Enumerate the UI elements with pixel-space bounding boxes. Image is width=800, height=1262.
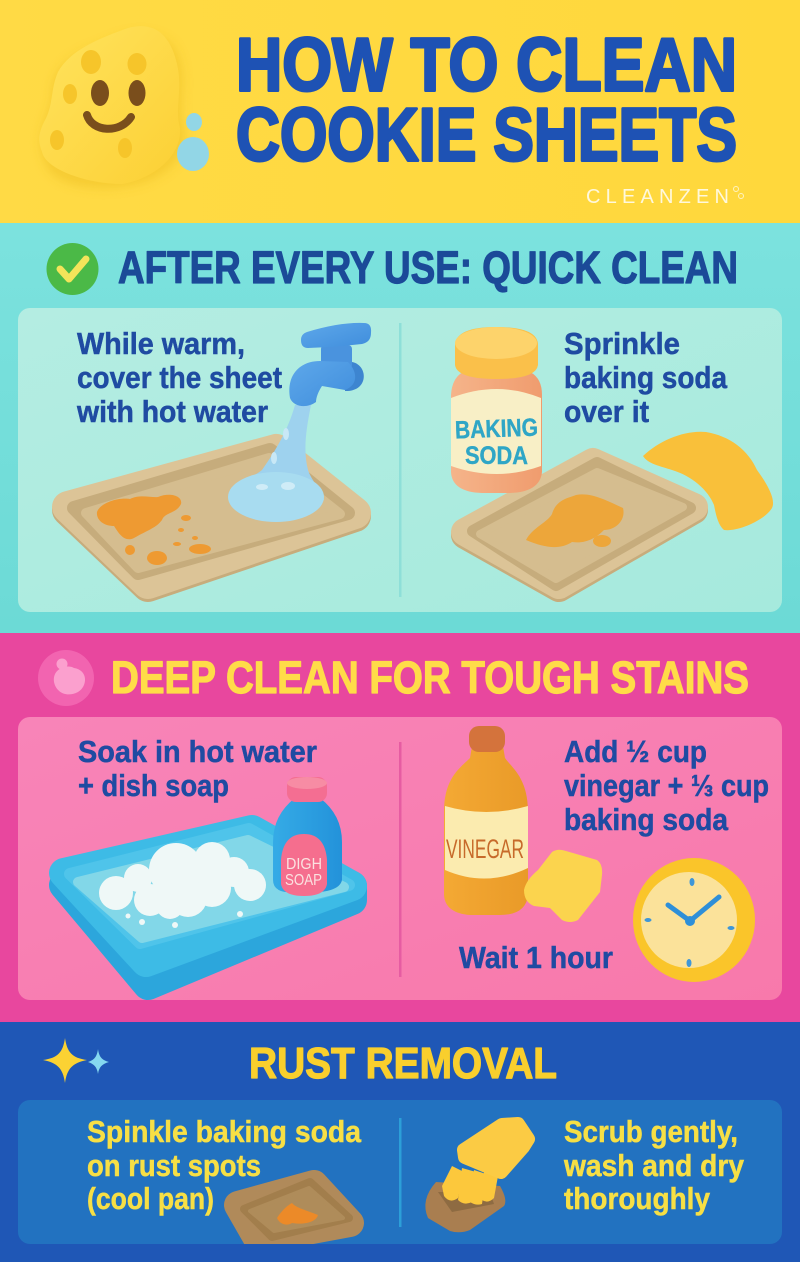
label text <box>455 414 538 470</box>
water stream and puddle <box>228 405 324 522</box>
step text: sprinkle on rust: on rust spots <box>87 1148 261 1183</box>
step text: sprinkle: over it <box>564 394 649 429</box>
dish soap bottle <box>273 777 342 896</box>
step text: hot water: with hot water <box>76 394 268 429</box>
section: quick clean <box>0 223 800 633</box>
step text: hot water <box>76 326 282 429</box>
tray with stain and cloth <box>465 462 694 588</box>
step text: sprinkle on rust: (cool pan) <box>87 1181 214 1216</box>
icon: water bubbles <box>177 113 209 171</box>
header band <box>0 0 800 223</box>
blue tub with suds <box>64 829 352 985</box>
icon: sparkles <box>43 1038 109 1083</box>
step text: scrub: Scrub gently, <box>564 1114 738 1149</box>
baking soda jar <box>451 327 542 493</box>
icon: green check <box>46 243 98 295</box>
icon: faucet <box>289 323 371 406</box>
step text: vinegar <box>564 734 769 837</box>
orange stain <box>97 495 211 565</box>
icon: clock <box>633 858 755 982</box>
section: deep clean <box>0 633 800 1022</box>
step text: soak: + dish soap <box>78 768 229 803</box>
label text <box>285 856 322 889</box>
step text: hot water: While warm, <box>77 326 245 361</box>
panel: quick clean steps <box>18 308 782 612</box>
yellow cloth <box>643 432 773 530</box>
step text: soak: Soak in hot water <box>78 734 317 769</box>
label text: DIGH <box>286 856 322 873</box>
title <box>236 22 737 176</box>
label text: SOAP <box>285 872 322 889</box>
vinegar bottle <box>444 726 528 915</box>
step text: scrub <box>563 1114 745 1216</box>
step text: vinegar: Add ½ cup <box>564 734 707 769</box>
icon: pink bubble <box>38 650 94 706</box>
step text: sprinkle on rust: Spinkle baking soda <box>87 1114 362 1149</box>
label text: VINEGAR <box>446 834 524 864</box>
panel: rust removal steps <box>18 1100 782 1244</box>
step text: scrub: wash and dry <box>563 1148 745 1183</box>
icon: smiling sponge <box>39 26 185 188</box>
brush scrubbing pad <box>425 1124 528 1232</box>
step text: wait: Wait 1 hour <box>459 940 613 975</box>
small pan with rust <box>238 1182 350 1240</box>
step text: sprinkle: baking soda <box>564 360 728 395</box>
step text: vinegar: baking soda <box>564 802 729 837</box>
section: rust removal <box>0 1022 800 1262</box>
step text: hot water: cover the sheet <box>77 360 282 395</box>
tray with stain <box>68 450 355 586</box>
step text: sprinkle: Sprinkle <box>564 326 680 361</box>
step text: sprinkle on rust <box>87 1114 362 1216</box>
step text: soak <box>78 734 317 803</box>
heading: rust removal: RUST REMOVAL <box>249 1039 557 1088</box>
rust stain <box>277 1203 318 1225</box>
panel: deep clean steps <box>18 717 782 1000</box>
brand: Cleanzen: CLEANZEN <box>586 186 729 208</box>
step text: vinegar: vinegar + ⅓ cup <box>564 768 769 803</box>
label text: SODA <box>465 442 528 470</box>
label text: BAKING <box>455 414 538 444</box>
yellow sponge <box>524 850 602 922</box>
soap suds <box>99 842 266 928</box>
stain <box>526 494 624 547</box>
step text: sprinkle <box>564 326 728 429</box>
step text: scrub: thoroughly <box>564 1181 711 1216</box>
